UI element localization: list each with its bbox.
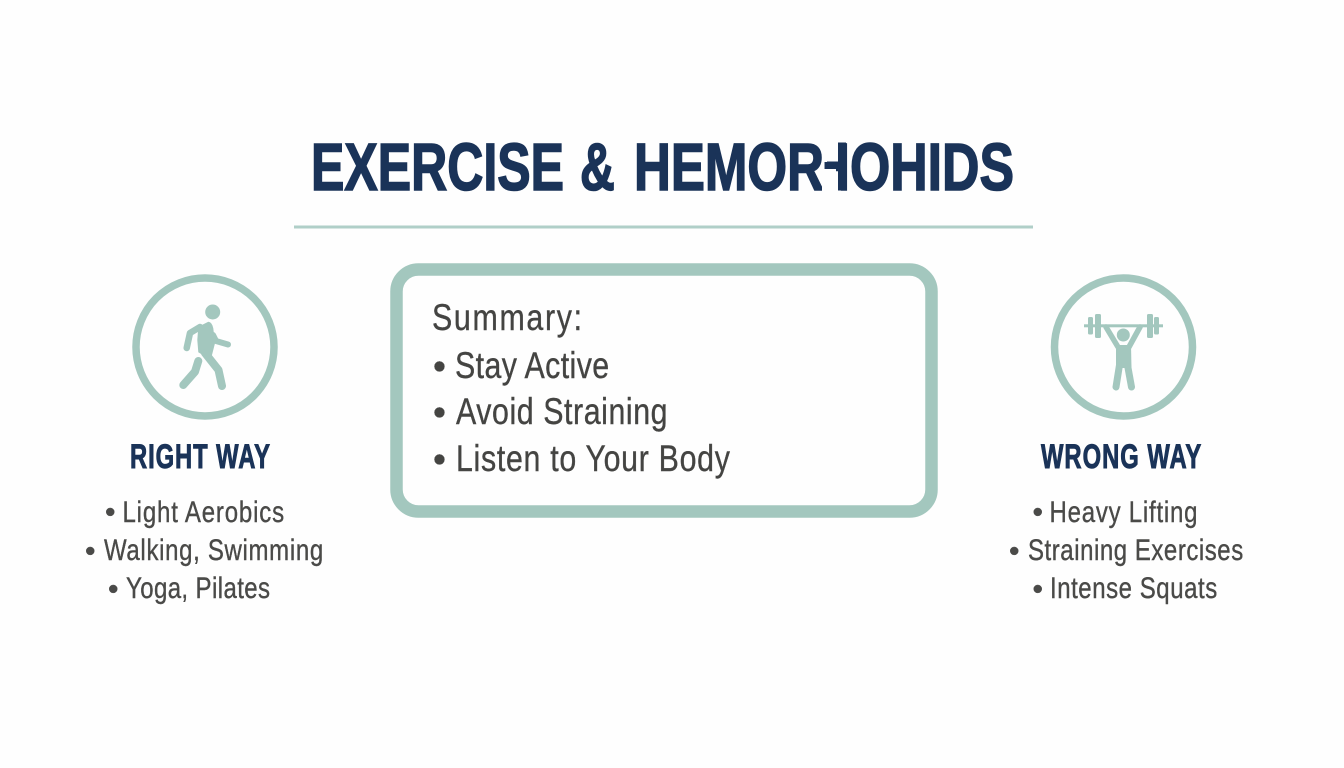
list: right way items: Light Aerobics: [122, 494, 284, 529]
title: [311, 130, 1014, 205]
summary text: Listen to Your Body: [456, 438, 730, 480]
icon: weightlifter: [1054, 278, 1192, 416]
panel: wrong way: [1009, 278, 1243, 606]
panel: summary: [396, 270, 932, 512]
title: H: [822, 131, 849, 205]
title: HEMOR: [634, 130, 824, 205]
list: wrong way items: [1009, 494, 1243, 606]
title: OHIDS: [850, 130, 1014, 205]
list: right way items: •: [85, 535, 96, 568]
title: &: [580, 130, 615, 205]
list: right way items: [85, 494, 323, 606]
list: right way items: •: [105, 496, 116, 529]
heading: wrong way: WRONG WAY: [1041, 438, 1202, 476]
summary text: [432, 297, 730, 480]
summary text: Avoid Straining: [456, 391, 668, 433]
panel: right way: [85, 278, 323, 606]
list: wrong way items: •: [1032, 573, 1043, 606]
summary text: Stay Active: [455, 345, 609, 387]
summary text: •: [433, 439, 446, 480]
list: right way items: •: [108, 573, 119, 606]
summary box: [396, 270, 932, 512]
summary text: •: [433, 392, 446, 433]
title: EXERCISE: [311, 130, 564, 205]
summary text: Summary:: [432, 297, 582, 339]
list: wrong way items: Heavy Lifting: [1050, 494, 1198, 529]
list: wrong way items: Intense Squats: [1050, 570, 1217, 605]
heading: right way: RIGHT WAY: [130, 438, 270, 476]
summary text: •: [433, 346, 446, 387]
title rule: [294, 226, 1033, 228]
list: wrong way items: •: [1009, 535, 1020, 568]
list: wrong way items: •: [1032, 496, 1043, 529]
list: right way items: Walking, Swimming: [104, 532, 323, 567]
list: wrong way items: Straining Exercises: [1028, 532, 1243, 567]
list: right way items: Yoga, Pilates: [126, 570, 270, 605]
icon: walking person: [136, 278, 274, 416]
